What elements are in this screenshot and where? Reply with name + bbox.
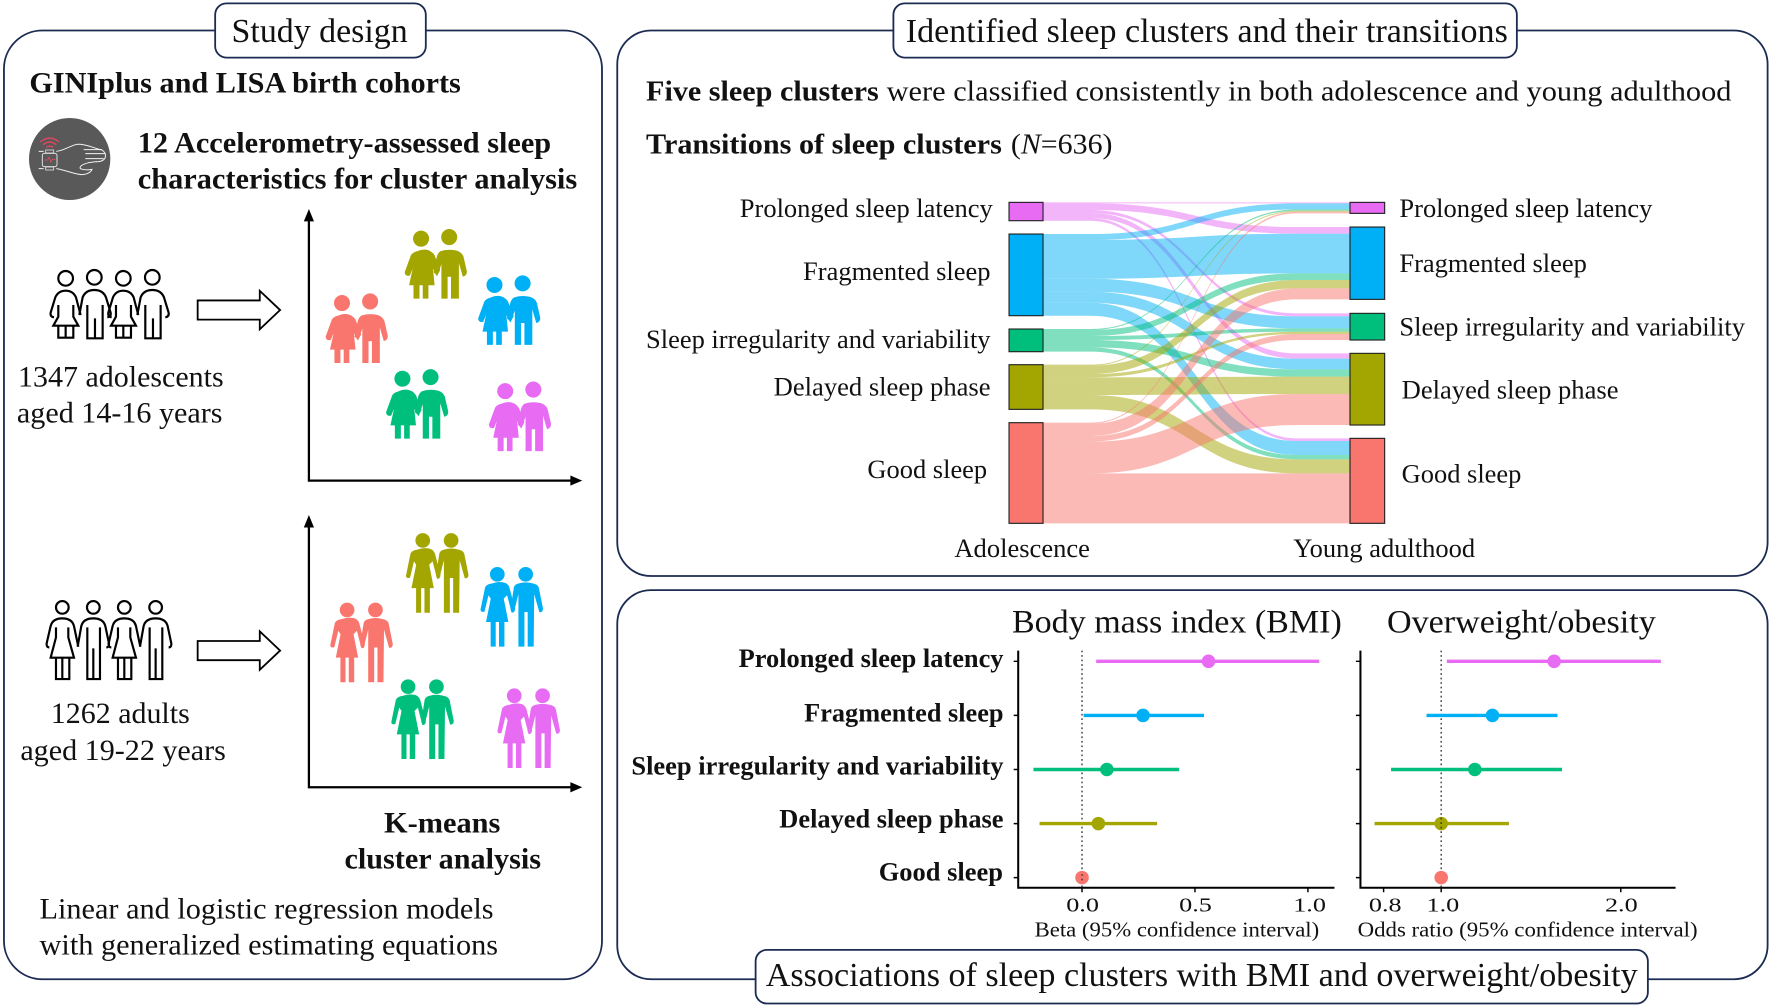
sankey labels: adolescence: Prolonged sleep latency (740, 193, 994, 223)
sankey labels: adolescence: Sleep irregularity and variability (646, 324, 991, 354)
heading: associations (756, 950, 1648, 1004)
sankey labels: adolescence: Adolescence (954, 533, 1090, 563)
sankey labels: adolescence: Good sleep (867, 454, 987, 484)
forest plot row labels: Prolonged sleep latency (739, 644, 1004, 673)
cohort heading: GINIplus and LISA birth cohorts (29, 67, 461, 100)
forest plot row labels: Delayed sleep phase (779, 804, 1004, 833)
sankey labels: adolescence: Delayed sleep phase (774, 371, 991, 401)
accelerometry text: 12 Accelerometry-assessed sleep (138, 127, 551, 159)
icon: adults group (47, 601, 171, 679)
accelerometry text (138, 127, 577, 196)
sankey labels: young adulthood: Prolonged sleep latency (1399, 193, 1653, 223)
sankey diagram (1009, 202, 1385, 523)
panel: study design (4, 3, 602, 979)
heading: associations: Associations of sleep clusters with BMI and overweight/obesity (766, 957, 1638, 994)
forest plot: BMI (1014, 651, 1334, 941)
icon: wrist accelerometer (29, 118, 110, 200)
forest plot: overweight/obesity: 1.0 (1427, 894, 1459, 916)
sankey labels: young adulthood: Good sleep (1402, 458, 1521, 488)
transitions statement: Transitions of sleep clusters (646, 129, 1002, 161)
forest plot: BMI: 1.0 (1293, 894, 1326, 916)
scatter: adult clusters (304, 515, 582, 792)
sankey labels: adolescence (646, 193, 1090, 563)
forest plot: overweight/obesity: 0.8 (1369, 894, 1402, 916)
sankey labels: young adulthood: Fragmented sleep (1399, 248, 1587, 278)
sankey labels: adolescence: Fragmented sleep (803, 256, 991, 286)
forest plot: overweight/obesity: 2.0 (1605, 894, 1638, 916)
forest plot titles: Body mass index (BMI) (1012, 604, 1342, 640)
five clusters statement: were classified consistently in both adolescence and young adulthood (887, 76, 1732, 108)
forest plot row labels: Sleep irregularity and variability (631, 751, 1004, 780)
forest plot: BMI: 0.0 (1066, 894, 1099, 916)
adolescents label: aged 14-16 years (17, 396, 223, 429)
heading: identified sleep clusters: Identified sleep clusters and their transitions (906, 13, 1508, 50)
adolescents label (17, 360, 224, 429)
forest plot row labels: Good sleep (879, 858, 1003, 887)
arrow: adults to clusters (198, 631, 280, 670)
sankey labels: young adulthood: Delayed sleep phase (1402, 375, 1619, 405)
heading: study design (215, 3, 426, 58)
arrow: adolescents to clusters (198, 291, 280, 329)
regression models text: Linear and logistic regression models (40, 892, 494, 925)
forest plot: BMI: Beta (95% confidence interval) (1035, 917, 1319, 941)
adults label: aged 19-22 years (20, 734, 226, 767)
forest plot titles (1012, 604, 1656, 640)
k-means label: cluster analysis (344, 843, 541, 876)
regression models text: with generalized estimating equations (40, 928, 498, 961)
k-means label: K-means (384, 806, 500, 839)
panel: sleep clusters and transitions (617, 3, 1768, 576)
sankey labels: young adulthood: Sleep irregularity and variability (1399, 311, 1746, 341)
panel: associations (617, 590, 1768, 1004)
forest plot row labels (631, 644, 1004, 887)
sankey labels: young adulthood (1293, 193, 1746, 563)
transitions statement: (N=636) (1011, 129, 1113, 161)
heading: identified sleep clusters (893, 3, 1517, 58)
regression models text (40, 892, 498, 961)
five clusters statement: Five sleep clusters (646, 76, 879, 108)
scatter: adolescent clusters (304, 209, 582, 486)
icon: adolescents group (51, 270, 169, 338)
adults label (20, 697, 226, 767)
k-means label (344, 806, 541, 876)
sankey labels: young adulthood: Young adulthood (1293, 533, 1475, 563)
forest plot: BMI: 0.5 (1179, 894, 1212, 916)
forest plot: overweight/obesity (1356, 651, 1698, 941)
adults label: 1262 adults (51, 697, 190, 730)
forest plot row labels: Fragmented sleep (804, 698, 1004, 727)
accelerometry text: characteristics for cluster analysis (138, 164, 577, 196)
heading: study design: Study design (232, 13, 408, 50)
adolescents label: 1347 adolescents (18, 360, 224, 393)
forest plot titles: Overweight/obesity (1387, 604, 1656, 640)
forest plot: overweight/obesity: Odds ratio (95% confidence interval) (1358, 917, 1698, 941)
